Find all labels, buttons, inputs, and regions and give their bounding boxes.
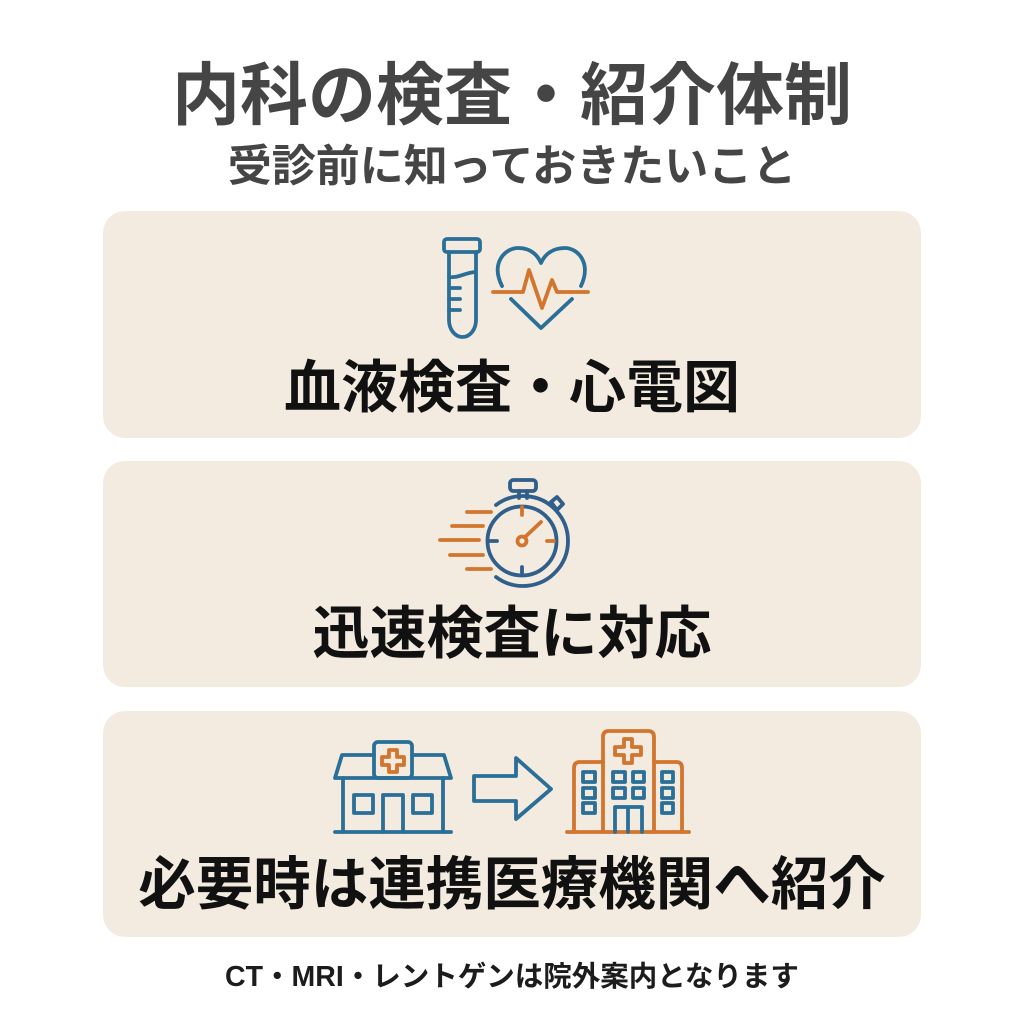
icon: clinic bbox=[335, 742, 451, 832]
footnote: CT・MRI・レントゲンは院外案内となります bbox=[225, 961, 799, 993]
arrow: referral direction bbox=[474, 758, 551, 819]
icon: stopwatch with speed lines bbox=[440, 480, 568, 586]
heading: referral: 必要時は連携医療機関へ紹介 bbox=[138, 853, 886, 917]
panel: referral bbox=[103, 711, 921, 937]
title: 内科の検査・紹介体制 bbox=[172, 58, 852, 134]
panel: blood test and ECG bbox=[103, 211, 921, 438]
heading: rapid testing: 迅速検査に対応 bbox=[312, 602, 712, 666]
icon: heart with ECG line bbox=[493, 248, 588, 328]
icon: hospital bbox=[567, 731, 689, 832]
heading: blood test and ECG: 血液検査・心電図 bbox=[284, 356, 740, 420]
icon: test tube bbox=[444, 239, 480, 337]
panel: rapid testing bbox=[103, 461, 921, 687]
subtitle: 受診前に知っておきたいこと bbox=[228, 142, 796, 191]
